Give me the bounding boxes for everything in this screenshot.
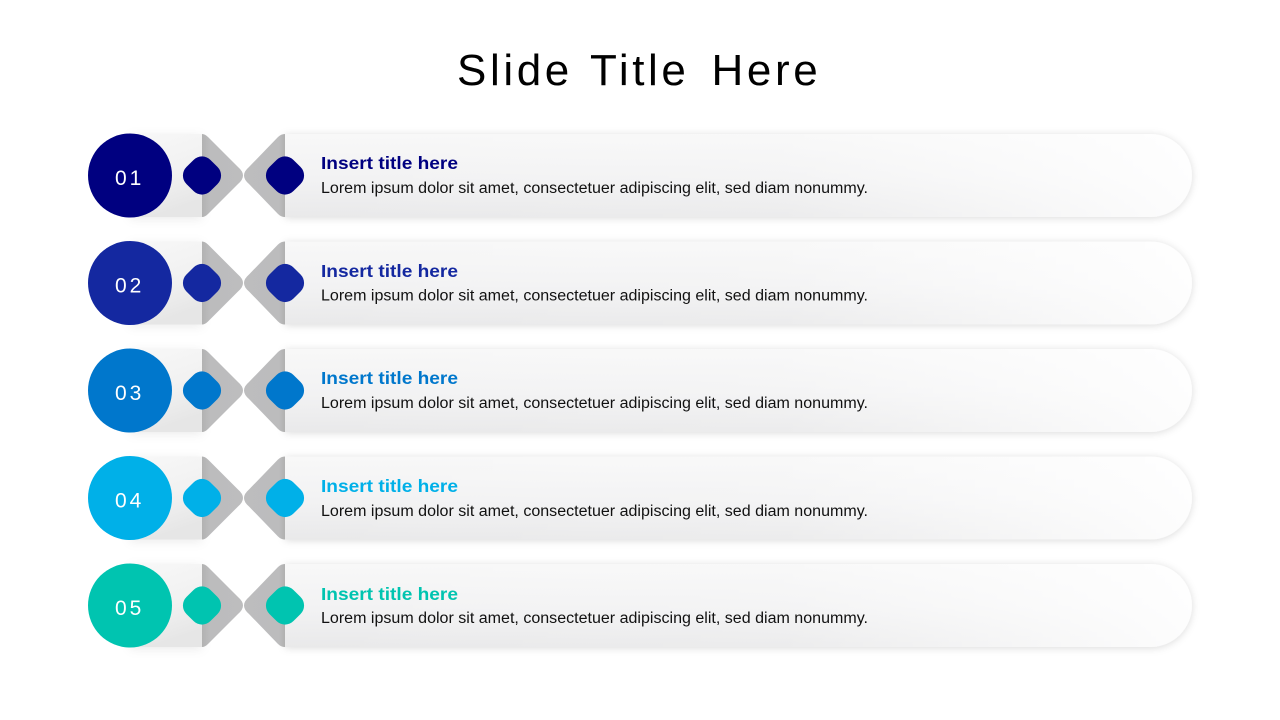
body text 1: Lorem ipsum dolor sit amet, consectetuer adipiscing elit, sed diam nonummy. bbox=[321, 180, 868, 197]
arrow left 4 bbox=[202, 456, 243, 540]
arrow left 2 bbox=[202, 242, 243, 324]
arrow right 5 bbox=[244, 564, 285, 647]
arrow left 3 bbox=[202, 349, 243, 432]
arrow right 1 bbox=[244, 134, 285, 217]
number 3: 03 bbox=[115, 382, 144, 405]
diamond right 3 bbox=[261, 366, 309, 415]
content pill 1 bbox=[285, 134, 1192, 217]
diamond left 4 bbox=[178, 474, 226, 522]
number 5: 05 bbox=[115, 597, 144, 620]
content pill 4 bbox=[285, 456, 1192, 540]
diamond left 5 bbox=[178, 581, 226, 630]
title: Slide bbox=[457, 46, 573, 95]
left tab 5 bbox=[130, 564, 202, 647]
number 4: 04 bbox=[115, 490, 144, 512]
number circle 1 bbox=[88, 134, 172, 218]
title: Title bbox=[590, 46, 690, 95]
arrow left 5 bbox=[202, 564, 243, 647]
heading 1: Insert title here bbox=[321, 153, 458, 173]
heading 3: Insert title here bbox=[321, 368, 458, 388]
number circle 4 bbox=[88, 456, 172, 540]
row 4 bbox=[88, 456, 1192, 540]
arrow right 2 bbox=[244, 242, 285, 324]
number circle 5 bbox=[88, 564, 172, 648]
number circle 3 bbox=[88, 348, 172, 432]
diamond right 5 bbox=[261, 581, 309, 630]
number circle 2 bbox=[88, 241, 172, 325]
heading 4: Insert title here bbox=[321, 476, 458, 496]
content pill 3 bbox=[285, 349, 1192, 432]
heading 5: Insert title here bbox=[321, 584, 458, 604]
body text 3: Lorem ipsum dolor sit amet, consectetuer adipiscing elit, sed diam nonummy. bbox=[321, 395, 868, 412]
number 2: 02 bbox=[115, 274, 144, 298]
left tab 4 bbox=[130, 456, 202, 540]
body text 5: Lorem ipsum dolor sit amet, consectetuer adipiscing elit, sed diam nonummy. bbox=[321, 610, 868, 627]
title: Here bbox=[712, 46, 821, 95]
diamond right 2 bbox=[261, 259, 309, 307]
left tab 1 bbox=[130, 134, 202, 217]
arrow left 1 bbox=[202, 134, 243, 217]
heading 2: Insert title here bbox=[321, 261, 458, 281]
row 5 bbox=[88, 564, 1192, 648]
arrow right 4 bbox=[244, 456, 285, 540]
row 3 bbox=[88, 348, 1192, 432]
content pill 5 bbox=[285, 564, 1192, 647]
left tab 3 bbox=[130, 349, 202, 432]
diamond right 4 bbox=[261, 474, 309, 522]
diamond left 1 bbox=[178, 151, 226, 200]
body text 4: Lorem ipsum dolor sit amet, consectetuer adipiscing elit, sed diam nonummy. bbox=[321, 503, 868, 520]
number 1: 01 bbox=[115, 167, 144, 190]
row 2 bbox=[88, 241, 1192, 325]
diamond right 1 bbox=[261, 151, 309, 200]
left tab 2 bbox=[130, 242, 202, 324]
content pill 2 bbox=[285, 242, 1192, 324]
body text 2: Lorem ipsum dolor sit amet, consectetuer adipiscing elit, sed diam nonummy. bbox=[321, 288, 868, 304]
row 1 bbox=[88, 134, 1192, 218]
arrow right 3 bbox=[244, 349, 285, 432]
diamond left 2 bbox=[178, 259, 226, 307]
diamond left 3 bbox=[178, 366, 226, 415]
